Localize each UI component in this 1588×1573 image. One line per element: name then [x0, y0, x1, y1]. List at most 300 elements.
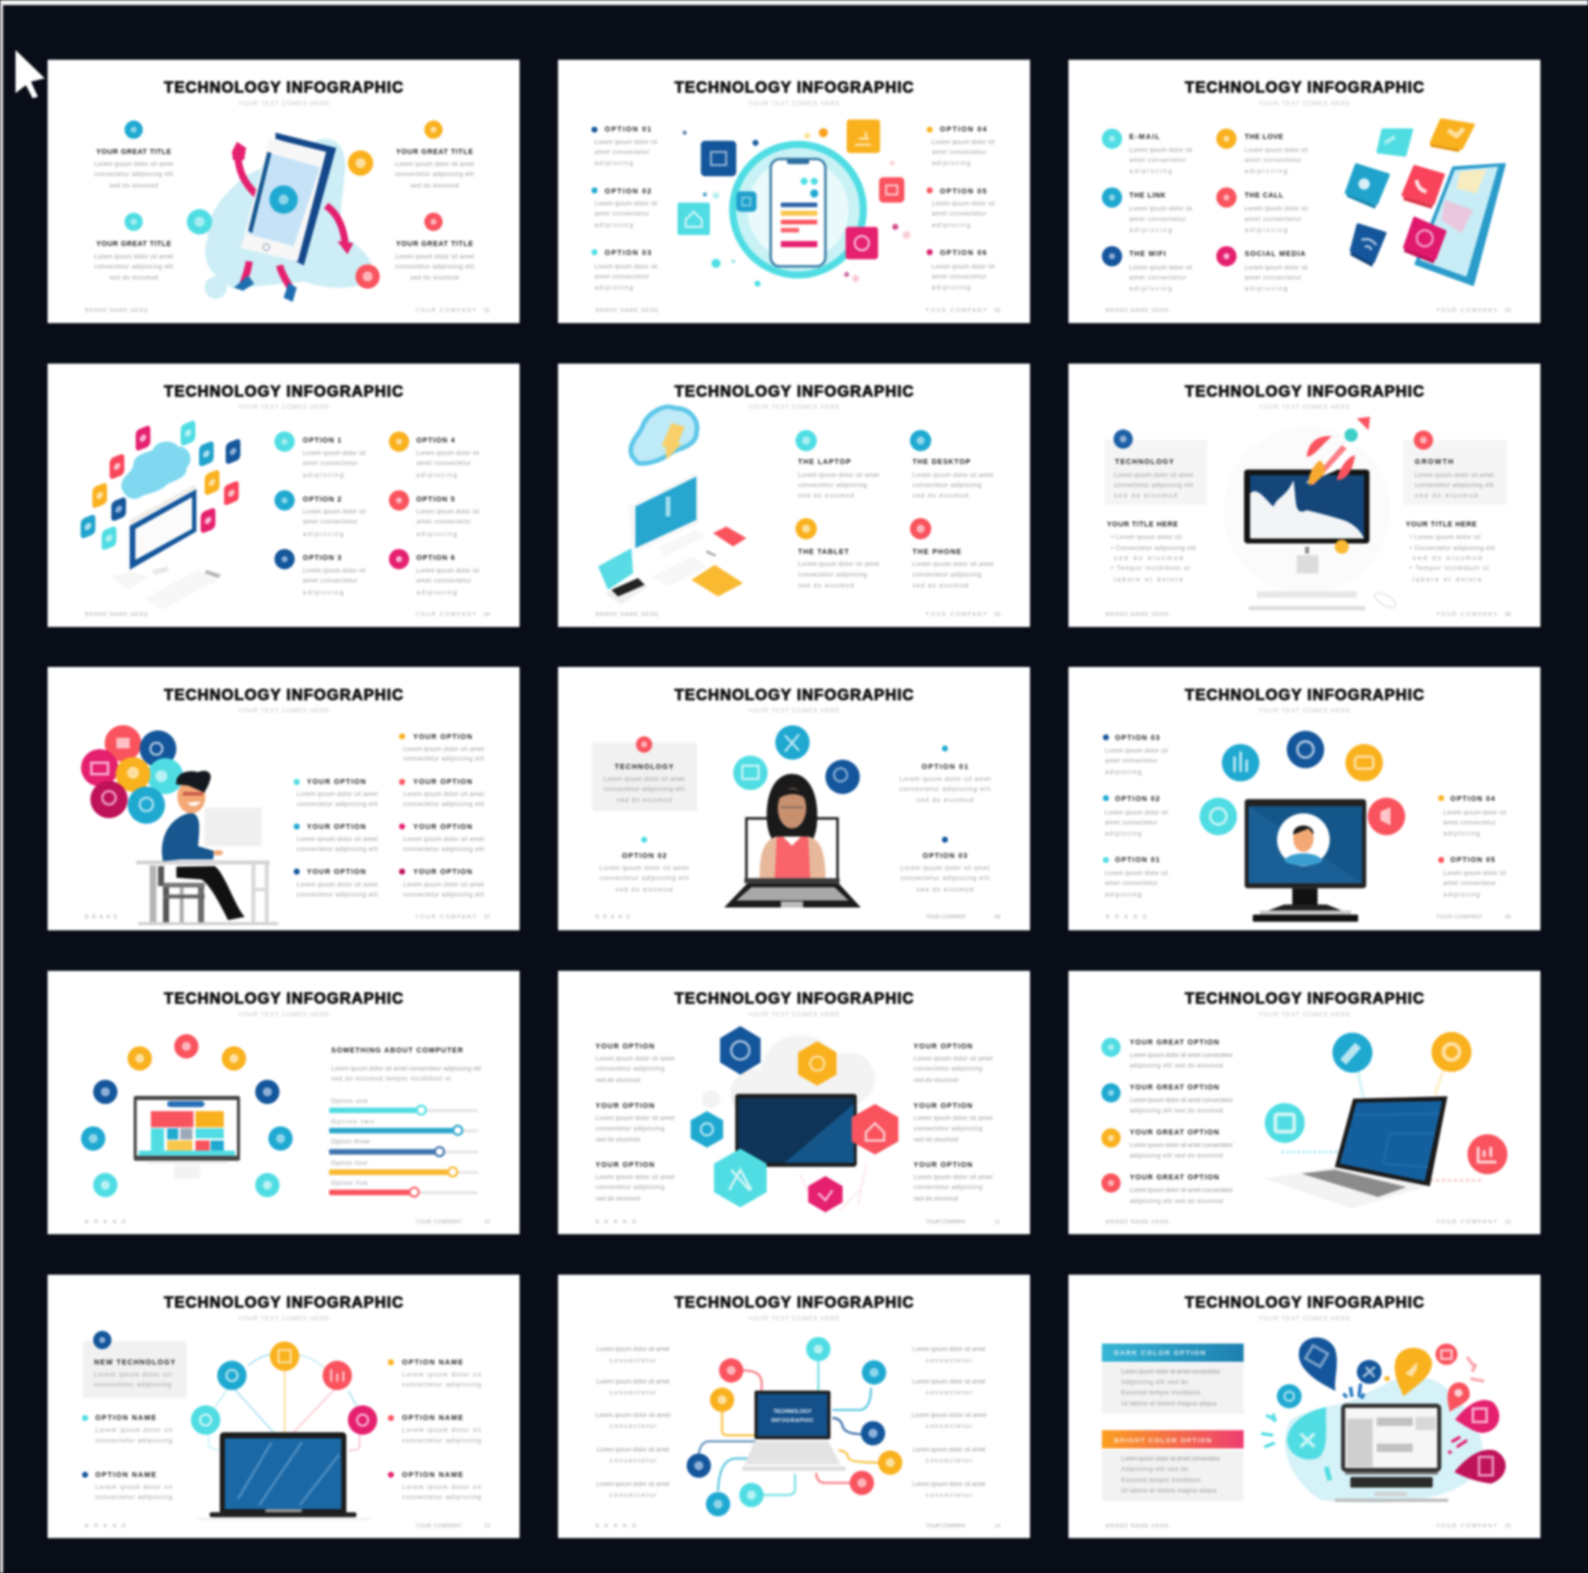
text block: your option maroon: YOUR OPTION [413, 868, 472, 876]
icon: yellow circle [270, 1342, 299, 1371]
footer: BRAND [1106, 915, 1147, 921]
text blocks: right column: Lorem ipsum dolor sit amet [911, 1412, 987, 1419]
title: TECHNOLOGY INFOGRAPHIC [674, 991, 914, 1008]
text block: option 02: OPTION 02 [1115, 795, 1160, 803]
text block: your option navy: consectetur adipiscing elit [297, 891, 378, 898]
text block: option 04: amet consectetur [1443, 819, 1496, 826]
text block: great option yellow: YOUR GREAT OPTION [1130, 1128, 1219, 1136]
title: TECHNOLOGY INFOGRAPHIC [674, 687, 914, 704]
text block: option 06 [927, 249, 995, 292]
text block: option 02: Lorem ipsum dolor sit [1105, 809, 1168, 816]
text block: the phone: consectetur adipiscing [912, 571, 982, 578]
text block: option 01: OPTION 01 [605, 126, 651, 134]
icon: cyan app square [678, 203, 710, 235]
text blocks: right options: Lorem ipsum dolor sit amet [914, 1174, 993, 1181]
text block: your option blue: YOUR OPTION [307, 823, 366, 831]
text block: option 01 [899, 745, 991, 804]
text block: option name red: Lorem ipsum dolor sit [402, 1427, 481, 1434]
footer: BRAND NAME HERE [1106, 308, 1169, 314]
text blocks: left options: YOUR OPTION [596, 1102, 654, 1110]
text block: option name pink: OPTION NAME [402, 1471, 463, 1479]
text blocks: left options: Lorem ipsum dolor sit amet [596, 1055, 675, 1062]
text block: technology: consectetur adipiscing elit [1114, 482, 1193, 489]
icon: blue chart circle [1222, 744, 1259, 781]
text blocks: right options: YOUR OPTION [914, 1161, 972, 1169]
callout box: dark color option: DARK COLOR OPTION [1114, 1350, 1205, 1357]
text block: the desktop: Lorem ipsum dolor sit amet [912, 472, 994, 479]
text block: the laptop: consectetur adipiscing [798, 482, 867, 489]
text blocks: right options: sed do eiusmod [914, 1137, 959, 1144]
text block: great option yellow: Lorem ipsum dolor sit amet consectetur [1130, 1142, 1233, 1149]
text block: option name navy: OPTION NAME [95, 1471, 156, 1479]
text block: option 05: Lorem ipsum dolor sit [932, 201, 995, 208]
text block: option 6: OPTION 6 [416, 554, 455, 562]
text block: option 1: amet consectetur [303, 460, 358, 467]
text block: option name pink: consectetur adipiscing [402, 1494, 482, 1501]
footer [1106, 1523, 1511, 1529]
icon: cyan dot bottom left [125, 213, 143, 231]
text blocks: right options: YOUR OPTION [914, 1102, 972, 1110]
text block: your option pink: YOUR OPTION [413, 823, 472, 831]
text box: technology: consectetur adipiscing elit [604, 786, 685, 793]
subtitle: YOUR TEXT COMES HERE [1259, 709, 1350, 715]
icon: red app square [879, 177, 904, 203]
footer: BRAND NAME HERE [85, 612, 148, 618]
callout box: dark color option [1102, 1344, 1244, 1414]
text block: the laptop: sed do eiusmod [798, 492, 854, 499]
connector lines [209, 1354, 360, 1450]
text blocks: right column: Lorem ipsum dolor sit amet [912, 1379, 986, 1386]
text block: option 5 [389, 490, 479, 538]
text block: option 02: adipiscing [594, 222, 633, 229]
text blocks: left options: YOUR OPTION [596, 1042, 654, 1050]
panel: slide 4 cloud monitor [48, 364, 520, 627]
subtitle: YOUR TEXT COMES HERE [238, 709, 329, 715]
text block: option 01: adipiscing [1105, 891, 1142, 898]
footer: YOUR COMPANY [926, 308, 987, 314]
subtitle: YOUR TEXT COMES HERE [238, 1012, 329, 1018]
text block: great option blue: YOUR GREAT OPTION [1130, 1083, 1219, 1091]
text blocks: right column: consectetur [926, 1357, 972, 1364]
icon: technology circle [1114, 429, 1133, 449]
title: TECHNOLOGY INFOGRAPHIC [164, 991, 403, 1008]
title: TECHNOLOGY INFOGRAPHIC [164, 384, 403, 401]
subtitle: YOUR TEXT COMES HERE [748, 101, 840, 107]
footer: 03 [1505, 308, 1511, 314]
text block: the tablet: consectetur adipiscing [798, 571, 867, 578]
footer: 07 [484, 915, 490, 921]
text block: your option blue [294, 823, 378, 853]
text box: new technology: NEW TECHNOLOGY [94, 1358, 175, 1366]
text block: option 1: OPTION 1 [303, 437, 341, 445]
footer: 08 [995, 915, 1000, 921]
text box: technology [592, 736, 697, 811]
text blocks: right column: consectetur [926, 1458, 972, 1465]
text block: the laptop: THE LAPTOP [798, 458, 851, 466]
text block: social media: Lorem ipsum dolor sit [1245, 264, 1308, 271]
text block: option 03: consectetur adipiscing elit [900, 875, 990, 882]
title: TECHNOLOGY INFOGRAPHIC [674, 384, 914, 401]
text block: left title two: consectetur adipiscing elit [94, 263, 173, 270]
text block: option 06: adipiscing [932, 285, 971, 292]
subtitle: YOUR TEXT COMES HERE [748, 1316, 840, 1322]
text blocks: left column: consectetur [610, 1423, 656, 1430]
panel: slide 6 rocket monitor [1068, 364, 1540, 627]
text block: great option red: Lorem ipsum dolor sit amet consectetur [1130, 1187, 1233, 1194]
text block: option name yellow: Lorem ipsum dolor sit [402, 1372, 481, 1379]
text block: the wifi: amet consectetur [1129, 275, 1186, 282]
icon: red circle [323, 1361, 352, 1390]
text block: option 05 [927, 187, 995, 229]
footer: BRAND [596, 915, 630, 921]
text block: option 02: OPTION 02 [622, 852, 666, 860]
text block: left title two [94, 240, 173, 282]
text block: your title here left: • Tempor incididunt ut [1111, 565, 1190, 572]
text block: option name navy: Lorem ipsum dolor sit [95, 1484, 172, 1491]
footer: YOUR COMPANY [926, 1523, 967, 1529]
text block: option 4: Lorem ipsum dolor sit [416, 450, 479, 457]
text blocks: right options: consectetur adipiscing [914, 1125, 983, 1132]
text block: the love [1216, 129, 1308, 175]
text blocks: left options: consectetur adipiscing [596, 1066, 665, 1073]
text block: technology: TECHNOLOGY [1115, 458, 1174, 466]
text block: option 02: sed do eiusmod [616, 886, 673, 893]
text block: growth: Lorem ipsum dolor sit amet [1415, 472, 1494, 479]
footer: BRAND NAME HERE [1106, 1523, 1169, 1529]
text block: option 4 [389, 431, 479, 479]
text block: option 03: adipiscing [594, 285, 633, 292]
text blocks: left options: consectetur adipiscing [596, 1125, 665, 1132]
text block: option 03: OPTION 03 [923, 852, 967, 860]
text block: option name navy: consectetur adipiscing [95, 1494, 173, 1501]
footer [85, 915, 490, 921]
footer: 13 [484, 1523, 490, 1529]
text block: your title here right: sed do eiusmod [1413, 555, 1482, 562]
illustration: isometric monitor and cloud [81, 420, 240, 610]
panel: slide 14 network circuit [558, 1275, 1030, 1538]
text blocks: right options: YOUR OPTION [914, 1042, 972, 1050]
text block: great option blue: Lorem ipsum dolor sit amet consectetur [1130, 1097, 1233, 1104]
text block: option 01: sed do eiusmod [917, 797, 974, 804]
text blocks: right options: Lorem ipsum dolor sit amet [914, 1115, 993, 1122]
text block: option 01 [1103, 856, 1168, 898]
text block: the love: Lorem ipsum dolor sit [1245, 147, 1308, 154]
text block: the love: THE LOVE [1245, 133, 1283, 141]
footer: YOUR COMPANY [1436, 1523, 1497, 1529]
text block: your option cyan: YOUR OPTION [307, 778, 366, 786]
text block: option 01: Lorem ipsum dolor sit [594, 139, 658, 146]
subtitle: YOUR TEXT COMES HERE [1259, 1012, 1350, 1018]
text blocks: left options: sed do eiusmod [596, 1137, 641, 1144]
text block: your option cyan [294, 778, 378, 808]
illustration: teardrops around laptop [1261, 1337, 1506, 1503]
text box: technology: TECHNOLOGY [615, 763, 674, 771]
text block: option 02 [591, 187, 658, 229]
text block: option 6: amet consectetur [416, 577, 471, 584]
text block: option 02: OPTION 02 [605, 187, 651, 195]
text block: your option pink: consectetur adipiscing elit [403, 846, 484, 853]
text block: your title here right: labore et dolore [1413, 576, 1482, 583]
footer: YOUR COMPANY [1436, 1220, 1497, 1226]
text block: the link [1102, 187, 1192, 234]
footer [1106, 612, 1511, 618]
text blocks: left options [596, 1042, 675, 1202]
text block: right title one: Lorem ipsum dolor sit amet [395, 161, 474, 168]
text block: the link: amet consectetur [1129, 216, 1186, 223]
illustration: phone in ring [729, 141, 867, 279]
text block: your title here right: • Tempor incididunt ut [1410, 565, 1489, 572]
callout box: bright color option [1102, 1430, 1244, 1501]
panel: slide 12 laptop with callouts [1068, 971, 1540, 1234]
text box: technology: sed do eiusmod [617, 797, 672, 804]
text block: right title one: sed do eiusmod [410, 182, 459, 189]
text blocks: right options: sed do eiusmod [914, 1195, 959, 1202]
icon: red floating circle [355, 264, 380, 289]
panel: slide 10 progress bars [48, 971, 520, 1234]
text block: social media: SOCIAL MEDIA [1245, 250, 1305, 258]
title: TECHNOLOGY INFOGRAPHIC [1185, 991, 1424, 1008]
icon: pink hexagon [808, 1176, 843, 1212]
text block: great option blue: adipiscing elit sed do eiusmod [1130, 1108, 1223, 1115]
text block: option 01: Lorem ipsum dolor sit [1105, 870, 1168, 877]
text blocks: right options: sed do eiusmod [914, 1077, 959, 1084]
text block: option 3 [274, 549, 366, 597]
text block: the tablet: sed do eiusmod [798, 582, 854, 589]
panel: slide 9 monitor profile [1068, 667, 1540, 930]
text block: growth: consectetur adipiscing elit [1415, 482, 1494, 489]
icon: yellow hexagon [798, 1041, 837, 1086]
text block: option 05 [1438, 856, 1506, 898]
text block: the call: amet consectetur [1245, 216, 1301, 223]
text block: your title here left: YOUR TITLE HERE [1107, 521, 1178, 529]
text blocks: right column: Lorem ipsum dolor sit amet [912, 1481, 986, 1488]
text block: option name pink: Lorem ipsum dolor sit [402, 1484, 481, 1491]
text block: option 3: adipiscing [303, 590, 344, 597]
icon: cyan hexagon [714, 1149, 767, 1207]
footer: BRAND NAME HERE [1106, 612, 1169, 618]
text block: your title here left: • Lorem ipsum dolor sit [1111, 534, 1182, 541]
text block: option 01 [591, 126, 658, 167]
illustration: phone with tiles [1346, 120, 1505, 285]
subtitle: YOUR TEXT COMES HERE [238, 1316, 329, 1322]
text block: your option blue: consectetur adipiscing elit [297, 846, 378, 853]
text block: your option maroon: Lorem ipsum dolor sit amet [403, 881, 484, 888]
text blocks: left column: Lorem ipsum dolor sit amet [597, 1346, 670, 1353]
text block: option 5: adipiscing [416, 531, 457, 538]
panel: slide 8 woman on laptop [558, 667, 1030, 930]
text block: your title here right: • Consectetur adipiscing elit [1410, 545, 1495, 552]
text block: option 04: OPTION 04 [940, 126, 986, 134]
footer [85, 1220, 490, 1226]
title: TECHNOLOGY INFOGRAPHIC [1185, 687, 1424, 704]
icon: cyan circle [733, 756, 768, 790]
text block: option 06: amet consectetur [932, 274, 986, 281]
text block: option 01: adipiscing [594, 160, 633, 167]
text block: the link: adipiscing [1129, 227, 1172, 234]
text block: social media: amet consectetur [1245, 275, 1301, 282]
text blocks: right column: Lorem ipsum dolor sit amet [912, 1346, 986, 1353]
footer: BRAND NAME HERE [596, 612, 659, 618]
illustration: dark screen [735, 1094, 857, 1167]
text block: option 02: Lorem ipsum dolor sit amet [600, 865, 689, 872]
text block: your title here right: YOUR TITLE HERE [1406, 521, 1477, 529]
panel: slide 13 laptop fan [48, 1275, 520, 1538]
panel: slide 7 man at desk [48, 667, 520, 930]
text block: option name red [388, 1414, 482, 1444]
text block: your option pink [399, 823, 484, 853]
text block: growth [1415, 458, 1494, 499]
text block: the phone: sed do eiusmod [912, 582, 969, 589]
text block: technology: sed do eiusmod [1114, 492, 1177, 499]
text block: left title one: YOUR GREAT TITLE [96, 148, 171, 156]
text block: your option red [399, 778, 484, 808]
text blocks: left column: Lorem ipsum dolor sit amet [597, 1481, 670, 1488]
title: TECHNOLOGY INFOGRAPHIC [1185, 384, 1424, 401]
icon: cyan circle [1200, 798, 1237, 835]
icon: pink circle [348, 1405, 377, 1435]
text block: the phone [910, 518, 994, 589]
title: TECHNOLOGY INFOGRAPHIC [164, 1295, 403, 1312]
text block: option 03: Lorem ipsum dolor sit [1105, 748, 1168, 755]
illustration: laptop with label: INFOGRAPHIC [771, 1418, 814, 1424]
text block: right title two: Lorem ipsum dolor sit amet [395, 253, 474, 260]
subtitle: YOUR TEXT COMES HERE [1259, 1316, 1350, 1322]
footer: BRAND [596, 1220, 636, 1226]
text block: your option navy [294, 868, 378, 898]
text block: your title here right: • Lorem ipsum dolor sit [1410, 534, 1481, 541]
text blocks: right options: consectetur adipiscing [914, 1184, 983, 1191]
text block: option 02: consectetur adipiscing elit [600, 875, 689, 882]
text block: option 06: OPTION 06 [940, 249, 986, 257]
text block: the desktop: consectetur adipiscing [912, 482, 982, 489]
title: TECHNOLOGY INFOGRAPHIC [1185, 80, 1424, 97]
text block: option 6: Lorem ipsum dolor sit [416, 567, 479, 574]
text block: your option yellow: YOUR OPTION [413, 733, 472, 741]
text block: option 03: amet consectetur [594, 274, 649, 281]
icon: blue tools circle [775, 725, 810, 760]
text block: option 06: Lorem ipsum dolor sit [932, 263, 995, 270]
text block: the wifi: adipiscing [1129, 286, 1172, 293]
text block: your option cyan: consectetur adipiscing elit [297, 801, 378, 808]
text block: great option yellow [1101, 1128, 1233, 1160]
icon: yellow circle [1345, 744, 1383, 781]
text blocks: left options: sed do eiusmod [596, 1077, 641, 1084]
footer: YOUR COMPANY [1436, 612, 1497, 618]
text block: option 03 [591, 249, 658, 292]
icon: blue small square [736, 191, 757, 212]
text block: the tablet [796, 518, 879, 589]
decorative dots [683, 128, 910, 287]
footer: YOUR COMPANY [1436, 915, 1483, 921]
footer [1106, 1220, 1511, 1226]
subtitle: YOUR TEXT COMES HERE [748, 709, 840, 715]
text block: option 2: OPTION 2 [303, 495, 341, 503]
text blocks: left column: consectetur [610, 1357, 656, 1364]
footer [596, 1523, 1000, 1529]
text block: option name cyan: consectetur adipiscing [95, 1437, 173, 1444]
text block: right title one: YOUR GREAT TITLE [396, 148, 473, 156]
text block: option 04: Lorem ipsum dolor sit [932, 139, 995, 146]
footer: 01 [484, 308, 490, 314]
footer [596, 915, 1000, 921]
text box: technology: Lorem ipsum dolor sit amet [604, 776, 685, 783]
text blocks: left options: sed do eiusmod [596, 1195, 641, 1202]
text block: option 04: Lorem ipsum dolor sit [1443, 809, 1506, 816]
icon: blue dot top left [125, 121, 143, 139]
illustration: laptop with label [742, 1391, 846, 1471]
text block: your option pink: Lorem ipsum dolor sit amet [403, 836, 484, 843]
footer: BRAND [85, 915, 118, 921]
illustration: dashboard laptop [134, 1096, 240, 1179]
text block: option 01: Lorem ipsum dolor sit amet [899, 776, 991, 783]
text block: the tablet: Lorem ipsum dolor sit amet [798, 561, 879, 568]
text block: option 5: OPTION 5 [416, 495, 455, 503]
text block: your title here left: • Consectetur adipiscing elit [1111, 545, 1196, 552]
text block: left title one [94, 148, 173, 189]
text block: option 03: amet consectetur [1105, 758, 1158, 765]
text blocks: left options: consectetur adipiscing [596, 1184, 665, 1191]
text blocks: left column [596, 1346, 671, 1499]
footer: YOUR COMPANY [926, 612, 987, 618]
text block: option 03: sed do eiusmod [917, 886, 974, 893]
text block: your option yellow: Lorem ipsum dolor sit amet [403, 746, 484, 753]
text block: technology: Lorem ipsum dolor sit amet [1114, 472, 1193, 479]
footer: 06 [1505, 612, 1511, 618]
decorative dashed pink links [800, 1165, 866, 1210]
text block: option name cyan: Lorem ipsum dolor sit [95, 1427, 172, 1434]
heading: something about computer: SOMETHING ABOUT COMPUTER [331, 1046, 463, 1054]
footer: 02 [995, 308, 1000, 314]
text block: option 5: amet consectetur [416, 519, 471, 526]
text block: left title one: sed do eiusmod [109, 182, 158, 189]
text block: your option navy: YOUR OPTION [307, 868, 366, 876]
text block: the phone: Lorem ipsum dolor sit amet [912, 561, 994, 568]
text block: option name yellow: consectetur adipiscing [402, 1382, 482, 1389]
text block: left title one: Lorem ipsum dolor sit amet [94, 161, 173, 168]
text block: option 05: adipiscing [932, 222, 971, 229]
title: TECHNOLOGY INFOGRAPHIC [674, 80, 914, 97]
text block: right title two [395, 240, 474, 282]
text block: option 02: amet consectetur [594, 211, 649, 218]
text block: the wifi: THE WIFI [1129, 250, 1166, 258]
text block: social media [1216, 246, 1308, 293]
text block: option 04: OPTION 04 [1450, 795, 1495, 803]
text block: option 03: OPTION 03 [1115, 734, 1160, 742]
text block: great option red: adipiscing elit sed do eiusmod [1130, 1198, 1223, 1205]
illustration: gears behind screen [702, 1035, 875, 1118]
text block: option 05: OPTION 05 [940, 187, 986, 195]
footer: BRAND [596, 1523, 636, 1529]
text block: the link: THE LINK [1129, 192, 1167, 200]
panel: slide 5 devices in the cloud [558, 364, 1030, 627]
text block: option name yellow: OPTION NAME [402, 1358, 463, 1366]
footer: YOUR COMPANY [415, 1220, 462, 1226]
footer: BRAND [85, 1523, 126, 1529]
text blocks: left column: Lorem ipsum dolor sit amet [597, 1446, 670, 1453]
text block: option name red: OPTION NAME [402, 1414, 463, 1422]
text block: the love: adipiscing [1245, 168, 1288, 175]
illustration: laptop with label: TECHNOLOGY [773, 1409, 812, 1415]
text block: the desktop: THE DESKTOP [912, 458, 970, 466]
text block: great option yellow: adipiscing elit sed do eiusmod [1130, 1153, 1223, 1160]
text block: option 3: amet consectetur [303, 577, 358, 584]
text block: option 4: amet consectetur [416, 460, 471, 467]
bar chart: skill bars: Option two [331, 1118, 374, 1125]
text block: option name navy [82, 1471, 173, 1501]
icon ring: nine circles [81, 1034, 293, 1197]
icon: yellow floating circle [348, 150, 373, 176]
text block: option 5: Lorem ipsum dolor sit [416, 509, 479, 516]
